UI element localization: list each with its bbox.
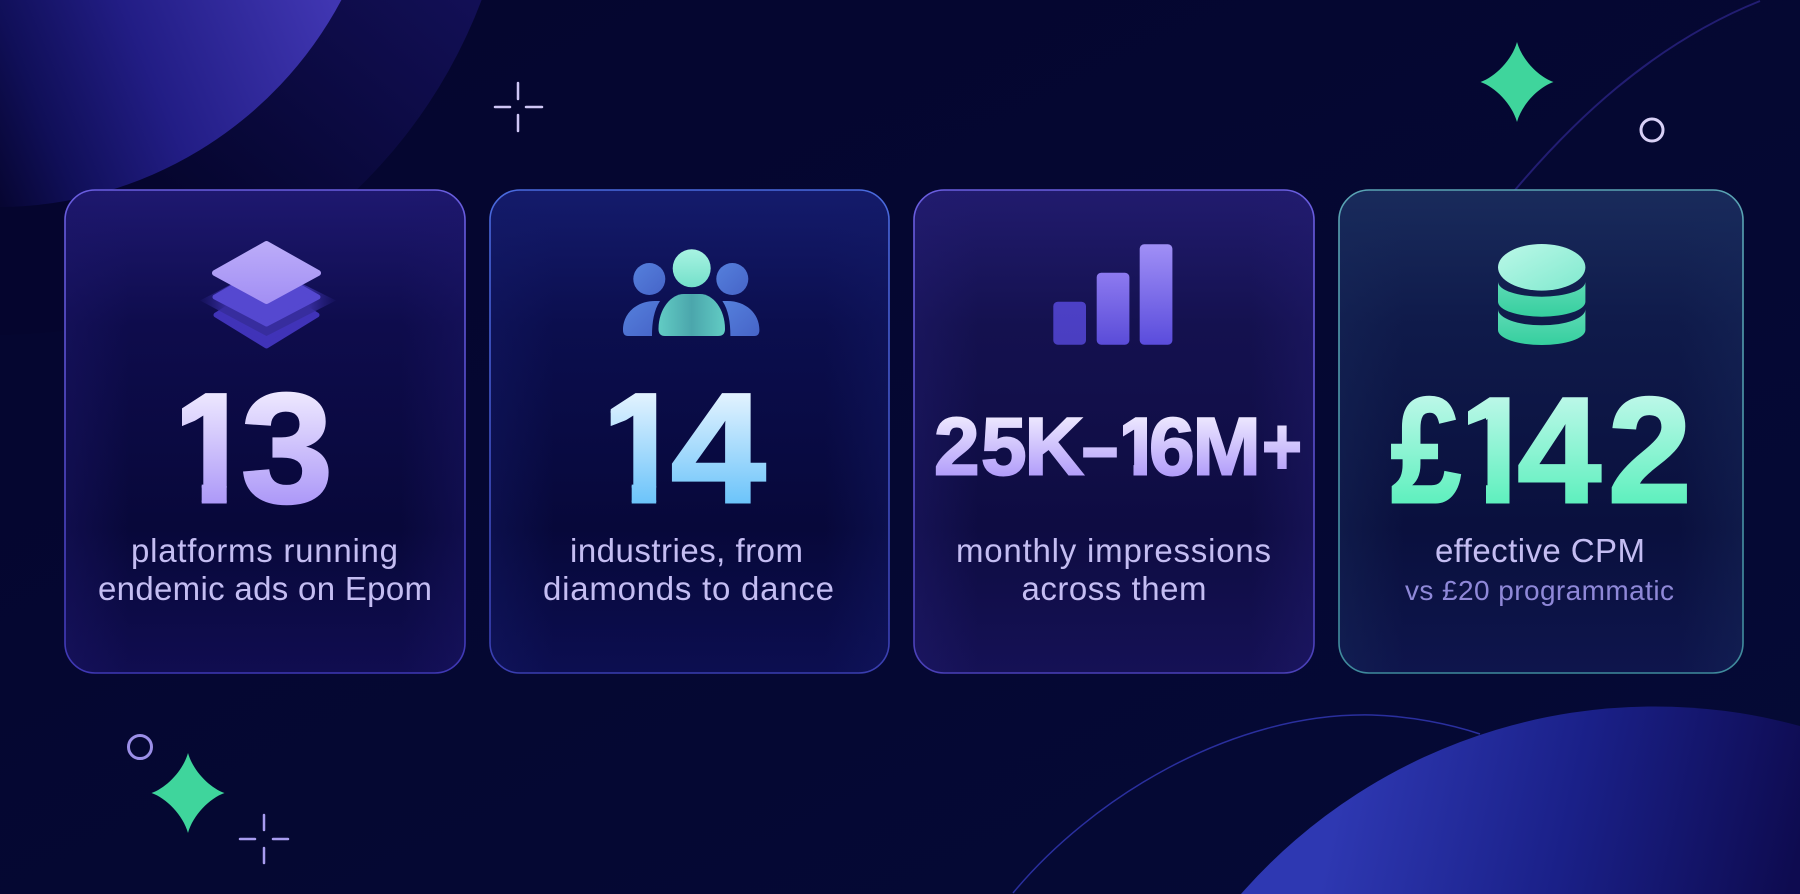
card background: [914, 190, 1314, 673]
label line 1: industries, from: [570, 532, 803, 569]
stat: 25K-16M+: –: [1082, 402, 1118, 492]
stat: 14: 4: [671, 362, 766, 536]
stat: £142: 1: [1454, 366, 1537, 534]
stat: 25K-16M+: [936, 416, 1300, 476]
icon: layers: [200, 244, 336, 346]
stat: 14: 1: [598, 362, 685, 536]
label line 1: effective CPM: [1435, 532, 1645, 569]
icon: green sparkle top: [1480, 42, 1554, 122]
card background: [1339, 190, 1743, 673]
label line 1: monthly impressions: [956, 532, 1271, 569]
label line 2: across them: [1022, 570, 1206, 607]
card border: [914, 190, 1314, 673]
panel: effective CPM: [1339, 190, 1743, 673]
stat: 13: 1: [168, 362, 255, 536]
icon: bar chart: [1053, 244, 1172, 345]
decorative arc: bottom: [1013, 715, 1480, 893]
panel: impressions: [914, 190, 1314, 673]
stat: 25K-16M+: 25K: [934, 402, 1084, 492]
stat: 14: [610, 393, 766, 504]
stat: £142: 42: [1518, 366, 1691, 534]
label line 2: diamonds to dance: [543, 570, 834, 607]
card background: [490, 190, 889, 673]
stat: 13: 3: [241, 362, 333, 536]
panel: industries: [490, 190, 889, 673]
stat: 25K-16M+: +: [1262, 402, 1302, 492]
stat: £142: [1391, 396, 1687, 504]
stat: 25K-16M+: 6M: [1149, 402, 1261, 492]
stat: 13: [182, 392, 329, 506]
label line 2: vs £20 programmatic: [1405, 575, 1674, 606]
icon: crosshair bottom: [240, 815, 288, 863]
card border: [1339, 190, 1743, 673]
decorative circle: bottom-right: [1241, 706, 1800, 894]
icon: people: [623, 249, 759, 336]
decorative circle: top-left inner: [0, 0, 341, 207]
decorative circle: top-left outer: [0, 0, 482, 335]
panel: platforms: [65, 190, 465, 673]
label line 2: endemic ads on Epom: [98, 570, 432, 607]
label line 1: platforms running: [131, 532, 398, 569]
card border: [65, 190, 465, 673]
card border: [490, 190, 889, 673]
card background: [65, 190, 465, 673]
icon: ring bottom: [128, 736, 152, 758]
stat: £142: £: [1391, 366, 1461, 534]
icon: crosshair top: [495, 83, 542, 131]
icon: green sparkle bottom: [152, 753, 224, 833]
icon: coins: [1498, 244, 1585, 345]
stat: 25K-16M+: 1: [1116, 402, 1162, 492]
decorative arc: top-right: [1515, 1, 1760, 190]
icon: ring top: [1641, 119, 1663, 141]
